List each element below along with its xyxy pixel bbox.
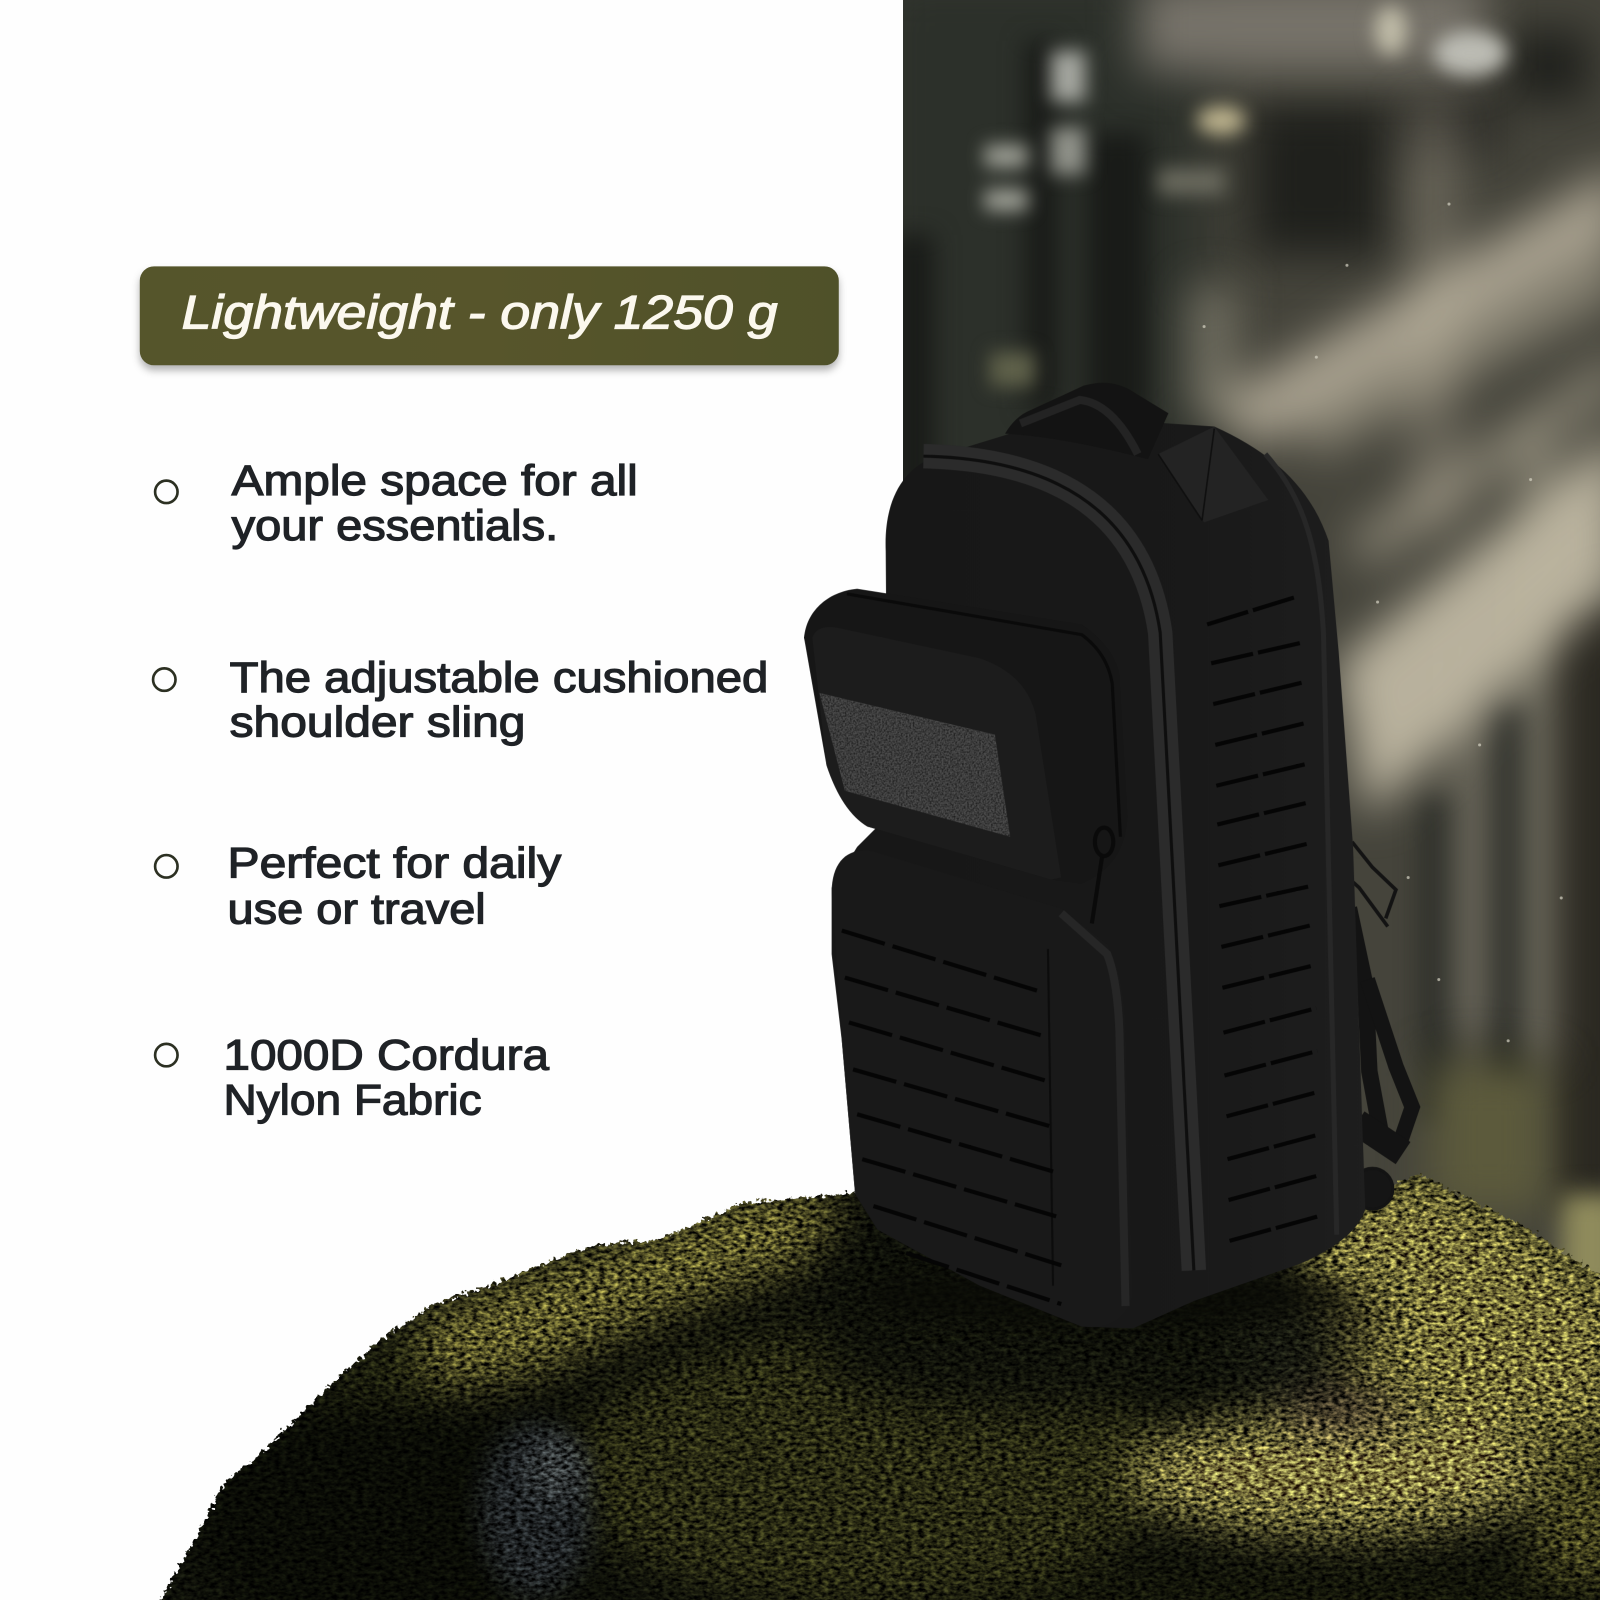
canopy light spots: [985, 6, 1507, 387]
forest floor: [1429, 1061, 1551, 1214]
side straps and toggles: [1337, 842, 1412, 1209]
lower pocket inner seam: [1048, 949, 1053, 1286]
feature 3 text: [228, 840, 562, 933]
feature 4: [155, 1031, 549, 1124]
upper pocket zip: [847, 594, 1120, 837]
feature 2: [153, 654, 768, 747]
handle strap highlight: [1020, 400, 1138, 454]
feature 3 text: Perfect for daily: [228, 840, 562, 888]
feature 1 text: Ample space for all: [232, 457, 638, 505]
feature 2 text: shoulder sling: [230, 699, 526, 747]
feature 4 text: [223, 1031, 549, 1124]
zip teeth: [923, 456, 1194, 1270]
upper-left green-dark canopy: [903, 0, 1224, 480]
warm haze at the top: [1138, 0, 1485, 71]
dark tree mass upper right: [1250, 31, 1590, 255]
moss light and shade: [194, 1163, 1600, 1600]
side laser-cut slots: [1207, 597, 1318, 1241]
lower front pocket: [832, 850, 1133, 1327]
dust specks: [1203, 203, 1563, 1042]
feature 2 text: [230, 654, 768, 747]
velcro tab on top: [1158, 427, 1268, 522]
feature 1: [155, 457, 638, 550]
main zip: [923, 456, 1194, 1270]
feature 4 text: 1000D Cordura: [223, 1031, 549, 1079]
ground shadow: [867, 1265, 1357, 1327]
feature 4 text: Nylon Fabric: [223, 1076, 482, 1124]
panel: mossy rock: [160, 1173, 1600, 1600]
feature 2 text: The adjustable cushioned: [230, 654, 768, 702]
lower pocket slots: [842, 931, 1061, 1304]
icon: backpack: [804, 383, 1412, 1329]
feature 1 text: [232, 457, 638, 550]
velcro patch: [819, 693, 1010, 837]
lower pocket zip: [1061, 913, 1126, 1306]
side panel seam: [1265, 454, 1337, 1235]
upper pocket front panel: [812, 627, 1061, 880]
light rays: [1189, 102, 1600, 1061]
panel: forest photo background: [862, 0, 1600, 1327]
headline text: Lightweight - only 1250 g: [182, 287, 778, 339]
feature 3 text: use or travel: [228, 885, 486, 933]
headline pill: [140, 266, 839, 365]
feature 3: [155, 840, 562, 933]
upper front pocket: [804, 589, 1128, 884]
main body: [832, 420, 1365, 1329]
zipper pull: [1092, 828, 1113, 923]
grey stone: [480, 1423, 592, 1597]
dark tree trunks: [893, 41, 1600, 1214]
feature 1 text: your essentials.: [232, 502, 558, 550]
top handle: [1005, 383, 1168, 459]
